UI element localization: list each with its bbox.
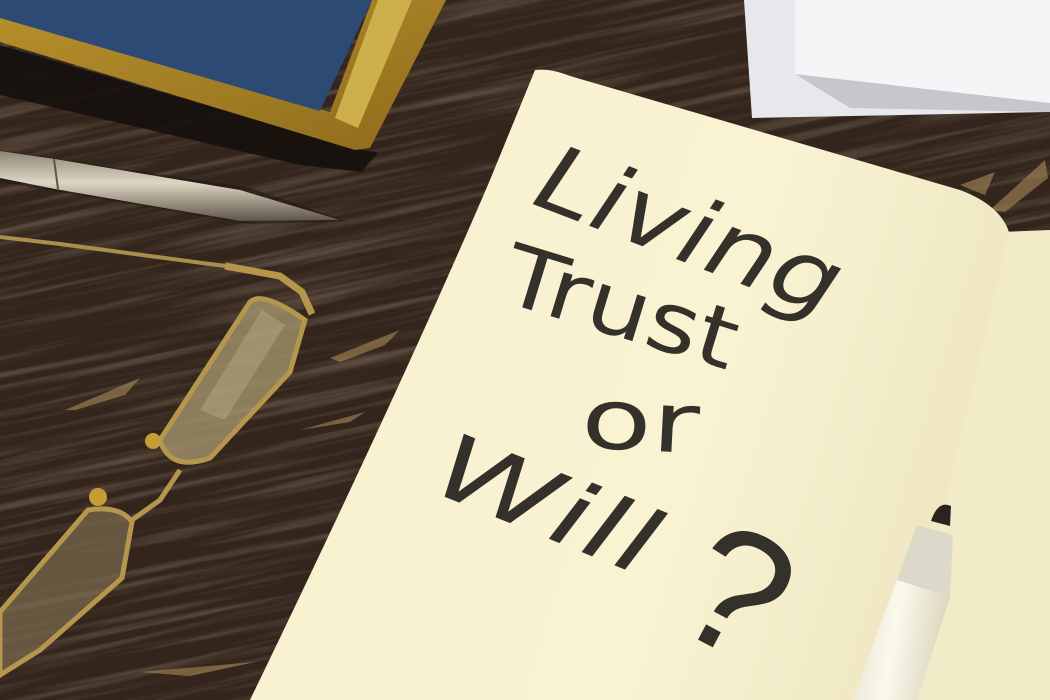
notebook: [250, 70, 1050, 700]
glasses bridge: [132, 470, 180, 520]
word: Living: Living: [522, 124, 857, 337]
word: Will: Will: [420, 413, 674, 597]
glasses arm: [0, 237, 225, 266]
upper lens: [160, 299, 305, 462]
handwriting: [420, 124, 857, 700]
word: Trust: Trust: [491, 225, 750, 389]
book gold page edge: [0, 0, 446, 150]
reading glasses: [0, 237, 312, 675]
lower lens: [0, 509, 132, 675]
marker pen: [852, 505, 953, 700]
book blue cover: [0, 0, 372, 111]
word: or: or: [579, 369, 703, 473]
question mark: ?: [647, 483, 825, 700]
book: [0, 0, 446, 172]
book shadow: [0, 45, 378, 172]
right notebook page: [890, 230, 1050, 700]
white papers: [744, 0, 1050, 118]
pen: [0, 150, 345, 224]
left notebook page: [250, 70, 1009, 700]
